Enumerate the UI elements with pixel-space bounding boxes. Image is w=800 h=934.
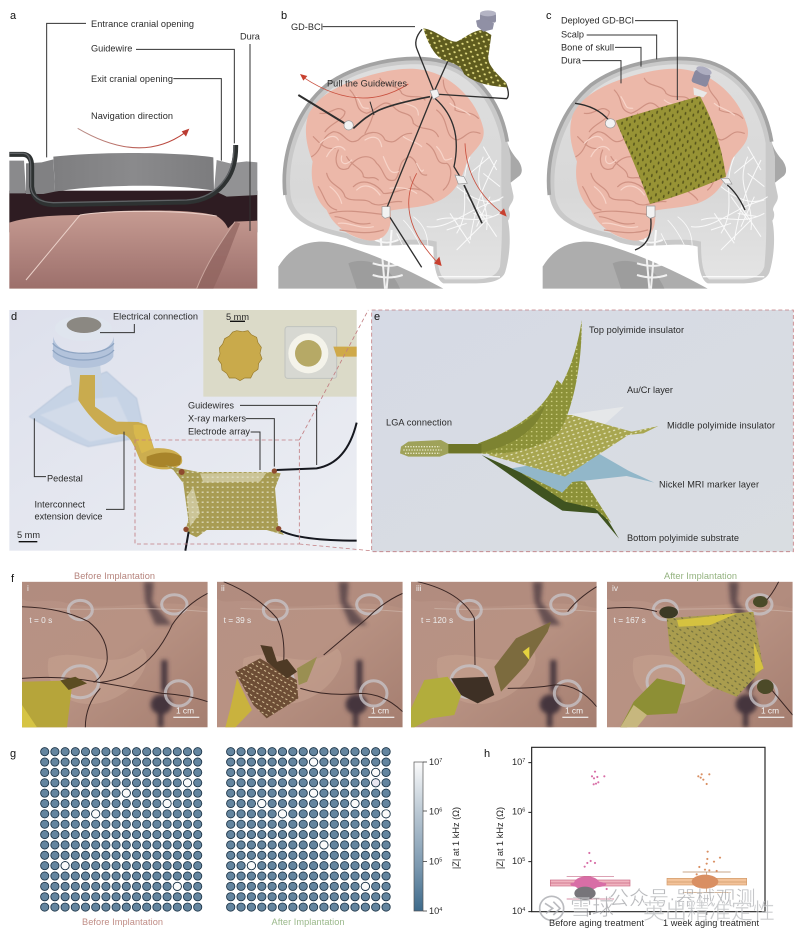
b connector xyxy=(476,10,496,32)
brain surface xyxy=(9,211,257,289)
watermark: 英出精准定性 xyxy=(643,899,775,924)
y tick labels: 4 xyxy=(522,907,525,913)
panel e: exploded layers xyxy=(372,310,793,552)
panel letter a: a xyxy=(10,10,17,22)
c deployed mesh xyxy=(616,96,726,204)
zoom dashed box xyxy=(135,310,370,551)
label: Entrance cranial opening xyxy=(91,19,194,29)
label: Pull the Guidewires xyxy=(327,78,407,88)
label: Top polyimide insulator xyxy=(589,325,684,335)
label: Interconnect xyxy=(34,500,86,510)
top layer xyxy=(478,320,582,454)
label: Middle polyimide insulator xyxy=(667,420,775,430)
guidewires xyxy=(185,423,357,551)
navigation arrow xyxy=(78,128,185,148)
photo i: t = 0 s xyxy=(29,615,52,625)
y tick labels: 6 xyxy=(522,808,525,814)
colour bar: 7 xyxy=(439,758,442,764)
photo i: i xyxy=(27,583,29,593)
leader lines xyxy=(323,21,677,100)
label: Guidewires xyxy=(188,400,234,410)
label: extension device xyxy=(34,512,102,522)
colour bar: 4 xyxy=(439,907,442,913)
panel letter f: f xyxy=(11,573,15,585)
watermark: 雪球 xyxy=(570,895,614,920)
before heading: Before Implantation xyxy=(74,571,155,581)
panel letter d: d xyxy=(11,311,17,323)
photo i xyxy=(22,582,208,727)
inset photo xyxy=(203,310,357,397)
c guidewires xyxy=(575,103,745,250)
panel h: impedance box plots xyxy=(484,747,775,928)
colour bar: 10 xyxy=(429,806,439,816)
label: Dura xyxy=(561,56,582,66)
label: Deployed GD-BCI xyxy=(561,16,634,26)
au cr layer xyxy=(565,407,624,424)
colour bar: 10 xyxy=(429,906,439,916)
guidewire xyxy=(9,145,236,205)
photo iv: 1 cm xyxy=(761,706,779,716)
panel d: device photograph xyxy=(9,310,370,551)
photo i: 1 cm xyxy=(176,706,194,716)
pink box xyxy=(550,876,630,899)
photo ii xyxy=(217,582,403,727)
neck and connector xyxy=(53,316,114,400)
b guidewires xyxy=(298,29,508,267)
x labels: Before aging treatment xyxy=(549,918,644,928)
pink scatter xyxy=(570,771,608,890)
gold interconnect xyxy=(78,375,182,469)
head c xyxy=(543,59,786,289)
colour bar xyxy=(414,757,461,916)
scale bars xyxy=(19,321,245,542)
markers xyxy=(179,468,281,532)
panel a: cranial cross-section xyxy=(9,10,261,289)
label: Pedestal xyxy=(47,474,83,484)
label: Electrode array xyxy=(188,426,250,436)
skull bone xyxy=(9,161,26,193)
label: Scalp xyxy=(561,30,584,40)
electrode array xyxy=(165,465,284,537)
photo iii: 1 cm xyxy=(565,706,583,716)
b device mesh xyxy=(423,28,507,87)
orange scatter xyxy=(692,773,721,889)
panel f: implantation time series xyxy=(11,571,793,727)
label: Nickel MRI marker layer xyxy=(659,480,759,490)
panel g: impedance maps xyxy=(10,748,461,927)
watermark xyxy=(570,887,775,924)
photo iii: iii xyxy=(416,583,422,593)
y tick labels xyxy=(512,757,525,916)
middle layer xyxy=(488,415,658,477)
y tick labels: 7 xyxy=(522,758,525,764)
colour bar: 5 xyxy=(439,858,442,864)
y axis title: |Z| at 1 kHz (Ω) xyxy=(495,807,505,869)
leader lines xyxy=(47,23,250,231)
y tick labels: 10 xyxy=(512,806,522,816)
y tick labels: 10 xyxy=(512,906,522,916)
label: Bottom polyimide substrate xyxy=(627,533,739,543)
label: Exit cranial opening xyxy=(91,74,173,84)
y tick labels: 10 xyxy=(512,757,522,767)
photo ii: t = 39 s xyxy=(224,615,251,625)
photo iv: iv xyxy=(612,583,619,593)
label: Bone of skull xyxy=(561,42,614,52)
after caption: After Implantation xyxy=(272,917,344,927)
label: Navigation direction xyxy=(91,111,173,121)
label: LGA connection xyxy=(386,418,452,428)
label: Au/Cr layer xyxy=(627,385,673,395)
panel letter b: b xyxy=(281,10,287,22)
bottom layer xyxy=(482,455,619,539)
before map xyxy=(41,748,202,911)
head b xyxy=(278,59,522,289)
nickel layer xyxy=(512,453,654,493)
colour bar: |Z| at 1 kHz (Ω) xyxy=(451,807,461,869)
panel b and c: head illustrations xyxy=(278,10,786,289)
photo iii: t = 120 s xyxy=(421,615,453,625)
photo iv xyxy=(607,582,793,727)
colour bar: 10 xyxy=(429,856,439,866)
panel letter c: c xyxy=(546,10,552,22)
after heading: After Implantation xyxy=(664,571,737,581)
label: X-ray markers xyxy=(188,414,246,424)
label: Guidewire xyxy=(91,44,132,54)
colour bar: 6 xyxy=(439,808,442,814)
y tick labels: 5 xyxy=(522,857,525,863)
label: Dura xyxy=(240,32,261,42)
axes xyxy=(532,747,765,912)
label: GD-BCI xyxy=(291,22,323,32)
watermark: 公众号·器械观测 xyxy=(609,887,756,910)
panel letter e: e xyxy=(374,311,380,323)
photo ii: 1 cm xyxy=(371,706,389,716)
dark dura layer xyxy=(9,191,257,232)
LGA xyxy=(400,440,482,457)
panel letter g: g xyxy=(10,748,16,760)
photo iii xyxy=(411,582,597,727)
after map xyxy=(227,748,390,911)
orange box xyxy=(667,872,747,892)
photo ii: ii xyxy=(221,583,225,593)
b red arrows xyxy=(303,77,503,263)
c nodes xyxy=(605,119,732,218)
before caption: Before Implantation xyxy=(82,917,163,927)
c connector xyxy=(691,64,713,97)
watermark logo xyxy=(540,896,564,920)
b anchor nodes xyxy=(344,89,467,218)
scale: 5 mm xyxy=(17,530,40,540)
x labels: 1 week aging treatment xyxy=(663,918,759,928)
grey cluster xyxy=(574,887,596,900)
leaders xyxy=(34,324,317,509)
colour bar: 10 xyxy=(429,757,439,767)
y tick labels: 10 xyxy=(512,856,522,866)
panel letter h: h xyxy=(484,748,490,760)
inset scale: 5 mm xyxy=(226,312,249,322)
pedestal xyxy=(29,372,145,447)
photo iv: t = 167 s xyxy=(614,615,646,625)
label: Electrical connection xyxy=(113,312,198,322)
